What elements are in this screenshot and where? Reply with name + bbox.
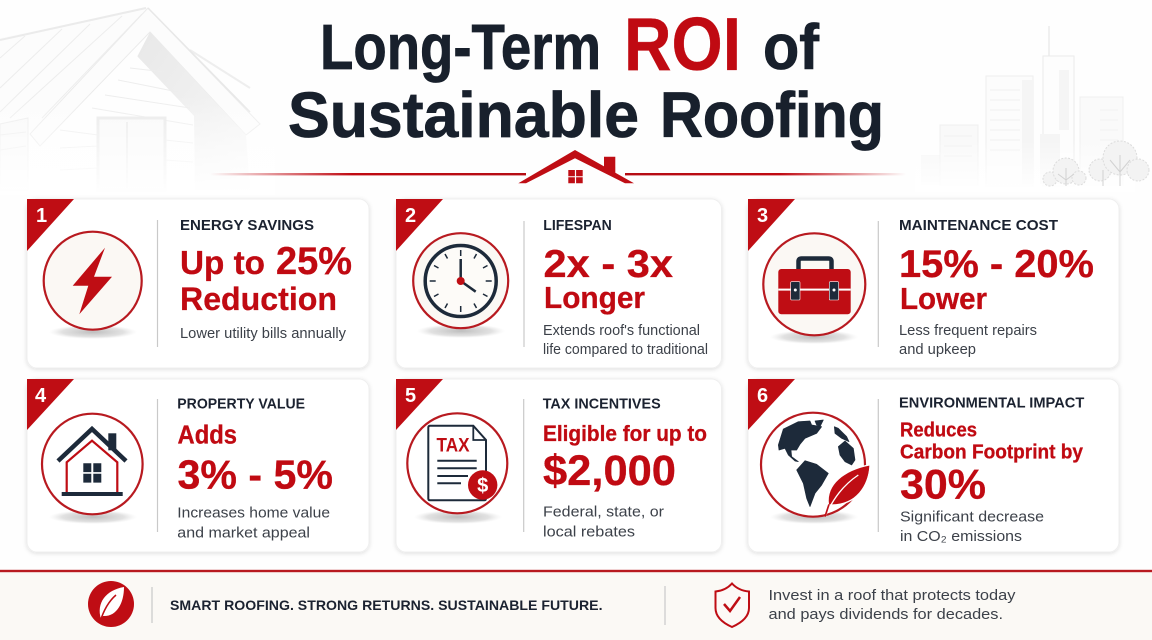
icon: house (42, 414, 143, 514)
icon: tax document (407, 413, 507, 513)
panel: property value: 3% - 5% (178, 451, 333, 497)
icon: tax document: TAX (436, 436, 470, 457)
panel: energy savings (27, 199, 369, 368)
panel: lifespan: 2x - 3x (544, 243, 673, 286)
panel: environmental impact: 30% (900, 460, 986, 507)
panel: energy savings: 1 (36, 205, 47, 227)
icon: clock (413, 233, 508, 328)
panel: energy savings: ENERGY SAVINGS (180, 217, 314, 234)
panel: property value: and market appeal (177, 525, 310, 542)
panel: tax incentives: local rebates (543, 524, 635, 541)
panel: tax incentives: 5 (405, 385, 416, 407)
icon: globe with leaf (761, 413, 870, 517)
panel: environmental impact: Reduces (900, 420, 977, 442)
title: ROI (624, 2, 741, 86)
icon: tax document: $ (477, 475, 488, 497)
panel: tax incentives: TAX INCENTIVES (543, 395, 661, 412)
panel: environmental impact: ENVIRONMENTAL IMPACT (899, 394, 1084, 411)
panel: energy savings: Up to (180, 244, 265, 281)
icon: lightning bolt (44, 232, 142, 330)
panel: maintenance cost: Lower (900, 281, 987, 316)
panel: environmental impact: Carbon Footprint by (900, 441, 1084, 463)
icon: shield with check (716, 584, 749, 627)
panel: environmental impact (748, 379, 1119, 552)
footer message (768, 587, 1016, 623)
panel: lifespan: life compared to traditional (543, 341, 708, 358)
title: of (763, 11, 820, 83)
panel: property value: Adds (178, 421, 237, 449)
panel: lifespan: LIFESPAN (543, 217, 612, 234)
panel: maintenance cost: Less frequent repairs (899, 322, 1037, 339)
icon: toolbox (763, 233, 865, 335)
panel: energy savings: Reduction (180, 281, 337, 317)
panel: environmental impact: Significant decrease (900, 509, 1044, 526)
panel: tax incentives: Federal, state, or (543, 504, 664, 521)
panel: environmental impact: 6 (757, 385, 768, 407)
panel: environmental impact: in CO₂ emissions (900, 528, 1022, 545)
footer band (0, 570, 1152, 640)
footer message: Invest in a roof that protects today (768, 587, 1016, 604)
icon: leaf badge (88, 581, 134, 627)
panel: tax incentives: $2,000 (543, 447, 676, 495)
panel: property value (27, 379, 369, 552)
footer message: and pays dividends for decades. (768, 606, 1003, 623)
panel: maintenance cost: 3 (757, 205, 768, 227)
title (288, 2, 884, 151)
panel: energy savings: 25% (276, 240, 352, 283)
panel: maintenance cost: 15% - 20% (899, 243, 1094, 286)
panel: energy savings: Lower utility bills annually (180, 325, 346, 342)
footer slogan: SMART ROOFING. STRONG RETURNS. SUSTAINABLE FUTURE. (170, 597, 602, 613)
panel: property value: 4 (35, 385, 47, 407)
panel: maintenance cost (748, 199, 1119, 368)
panel: lifespan: 2 (405, 205, 416, 227)
title: Long-Term (320, 11, 601, 83)
panel: maintenance cost: MAINTENANCE COST (899, 217, 1058, 234)
panel: maintenance cost: and upkeep (899, 341, 976, 358)
panel: tax incentives (396, 379, 722, 552)
background illustration: city skyline and trees (915, 26, 1149, 192)
panel: lifespan: Extends roof's functional (543, 322, 700, 339)
title: Sustainable (288, 79, 639, 151)
panel: lifespan: Longer (544, 280, 645, 315)
panel: property value: PROPERTY VALUE (177, 395, 305, 412)
panel: property value: Increases home value (177, 505, 330, 522)
background illustration: house (0, 8, 275, 195)
title divider with house icon (210, 150, 906, 183)
title: Roofing (660, 79, 884, 151)
panel: tax incentives: Eligible for up to (543, 421, 707, 446)
panel: lifespan (396, 199, 722, 368)
